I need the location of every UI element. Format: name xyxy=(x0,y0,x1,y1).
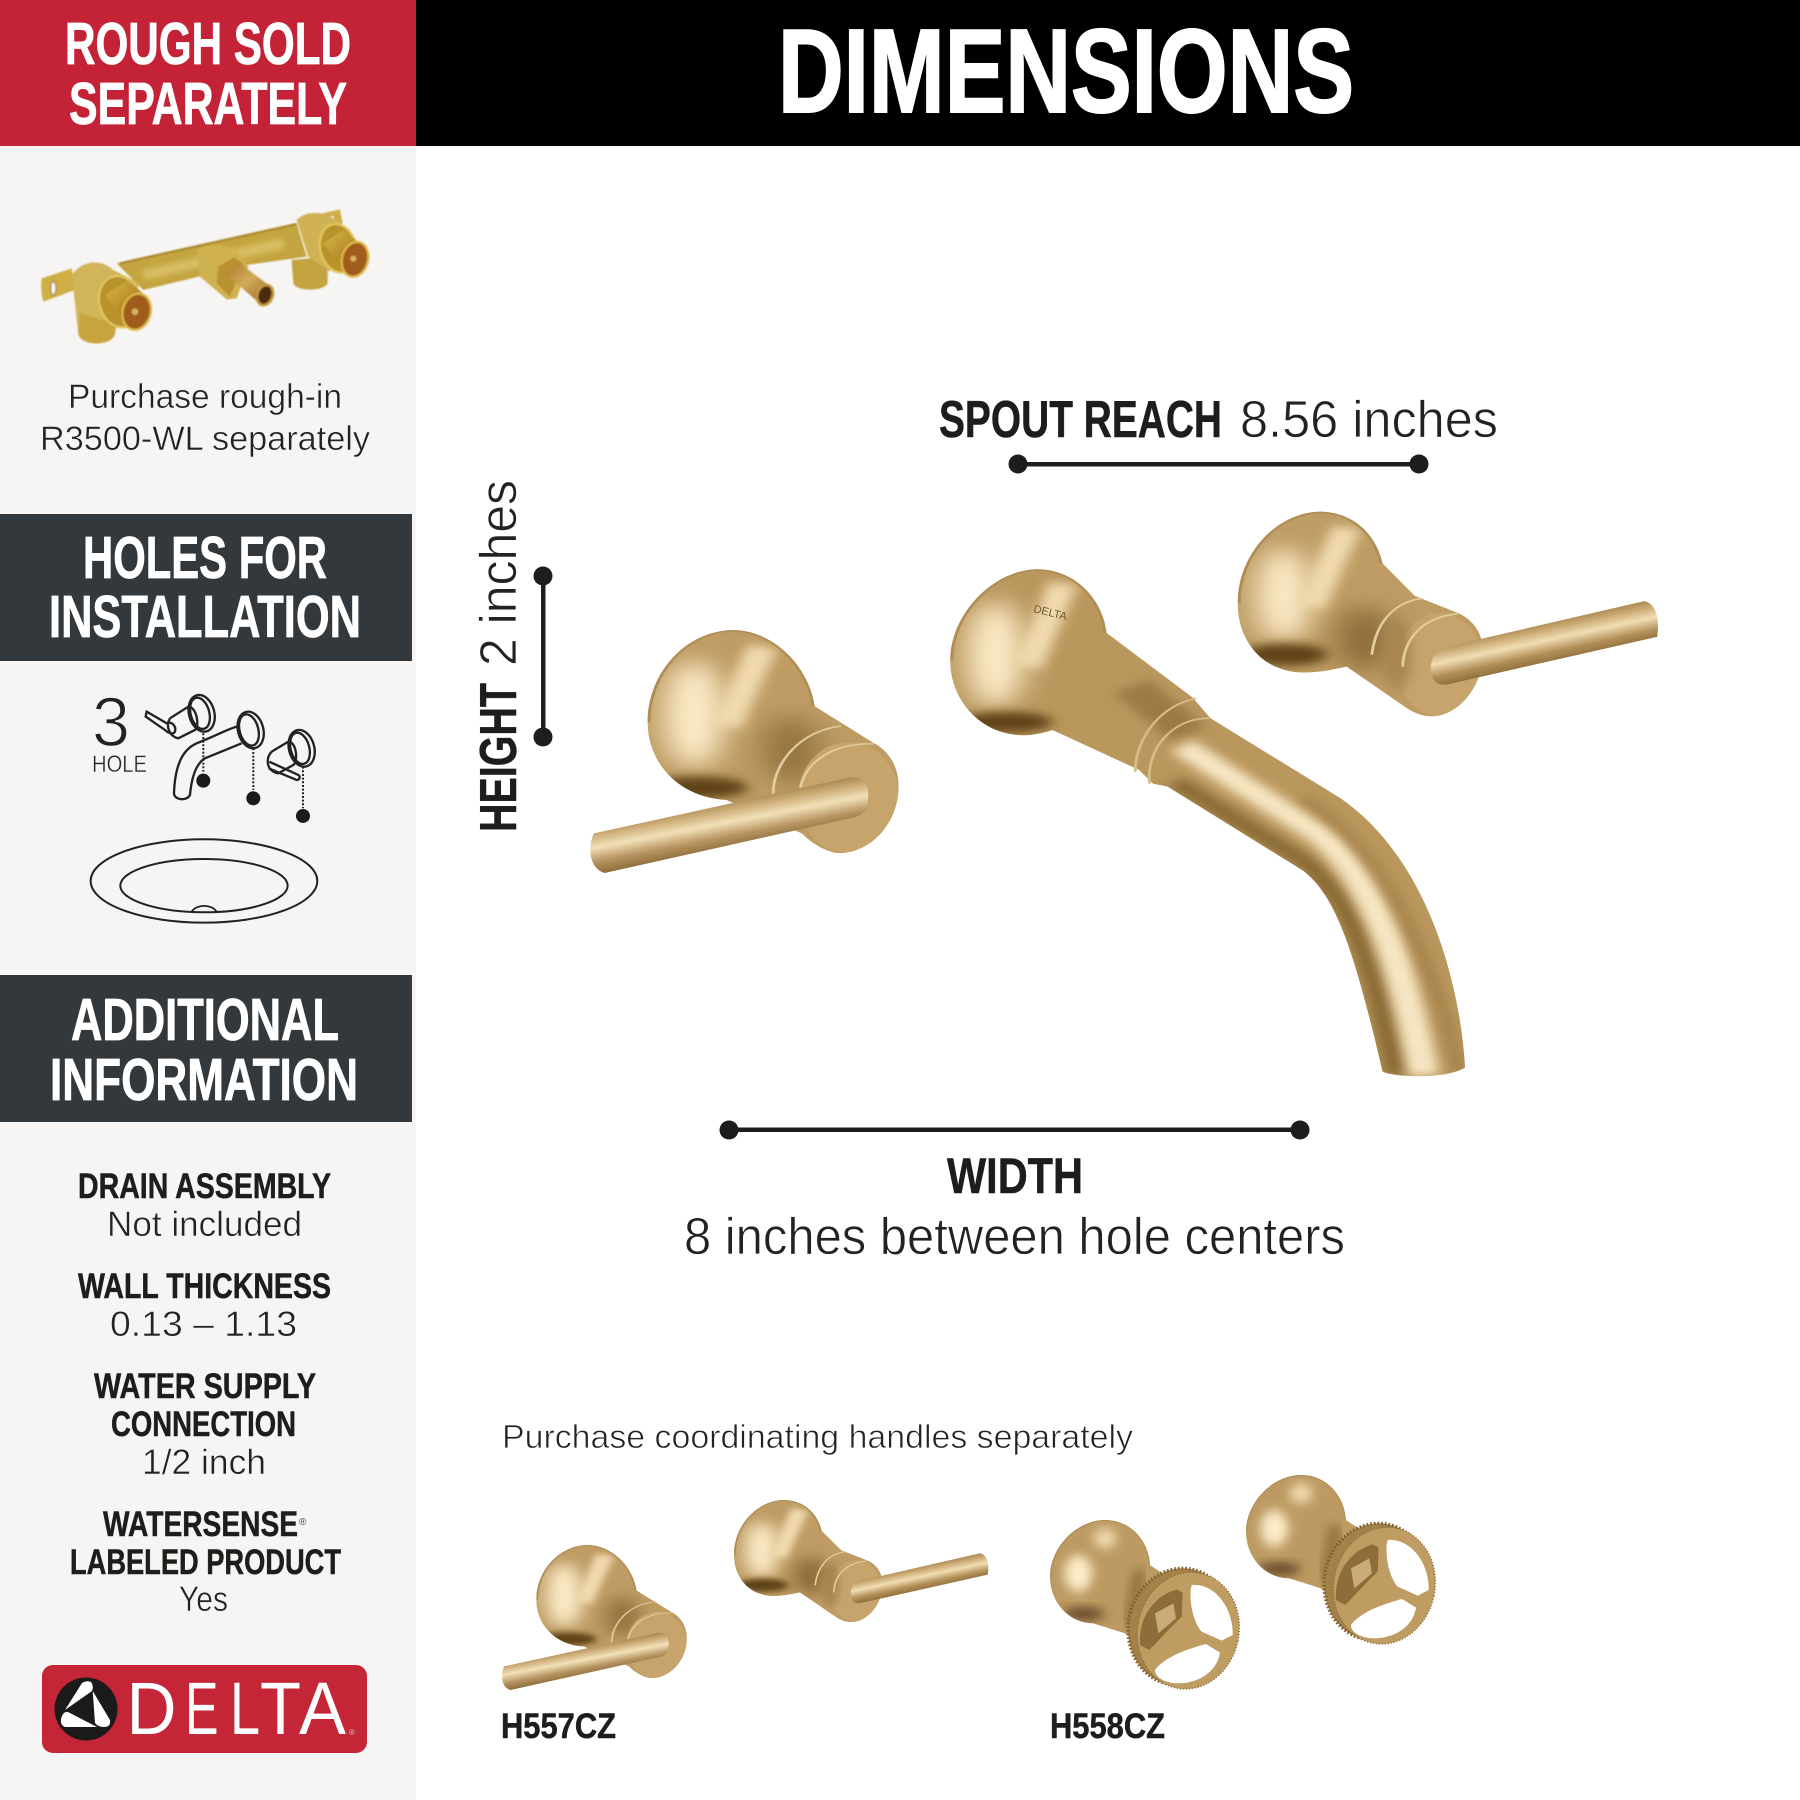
text block: additional information list: Yes xyxy=(179,1580,228,1619)
label: H558CZ: H558CZ xyxy=(1050,1707,1165,1746)
logo text on spout: DELTA xyxy=(1032,603,1069,623)
handle: left lever small xyxy=(502,1541,698,1690)
text block: additional information list: Not included xyxy=(107,1205,302,1244)
text block: additional information list: DRAIN ASSEMBLY xyxy=(78,1167,331,1206)
product image: wall mount faucet xyxy=(590,504,1658,1083)
heading: additional information: ADDITIONAL xyxy=(71,987,339,1053)
logo: delta: E xyxy=(185,1667,218,1750)
logo: delta xyxy=(42,1665,367,1753)
header: dimensions xyxy=(416,0,1800,146)
label: height: HEIGHT xyxy=(470,683,528,832)
label: spout reach: 8.56 inches xyxy=(1240,391,1498,449)
spout xyxy=(938,563,1483,1083)
product image: H557CZ handles xyxy=(502,1495,988,1690)
header: rough sold separately: ROUGH SOLD xyxy=(65,11,351,77)
text block: additional information list: WATERSENSE xyxy=(103,1505,298,1544)
heading: additional information: INFORMATION xyxy=(50,1047,358,1113)
label: spout reach xyxy=(939,391,1498,449)
text block: additional information list xyxy=(70,1167,341,1619)
heading: holes for installation: HOLES FOR xyxy=(83,525,327,591)
header: rough sold separately: SEPARATELY xyxy=(69,71,347,137)
product image: rough-in valve xyxy=(41,209,372,343)
label: width: WIDTH xyxy=(947,1148,1083,1204)
handle: right wheel xyxy=(1243,1472,1446,1654)
text: purchase coordinating handles: Purchase coordinating handles separately xyxy=(502,1418,1134,1455)
icon: 3 hole faucet and basin: HOLE xyxy=(92,751,147,778)
label: height: 2 inches xyxy=(470,480,528,666)
text: purchase rough-in: Purchase rough-in xyxy=(68,378,342,416)
arrow: height dimension line xyxy=(534,566,552,746)
text block: additional information list: WATER SUPPLY xyxy=(94,1367,316,1406)
text block: additional information list: 1/2 inch xyxy=(142,1443,266,1482)
left lever handle xyxy=(590,623,916,873)
logo: delta: L xyxy=(230,1667,260,1750)
logo: delta: T xyxy=(260,1667,301,1750)
arrow: width dimension line xyxy=(720,1120,1310,1140)
header: dimensions: DIMENSIONS xyxy=(778,5,1354,138)
text block: additional information list: CONNECTION xyxy=(111,1405,296,1444)
panel: sidebar xyxy=(0,146,416,1800)
logo: delta: A xyxy=(299,1667,347,1750)
label: height xyxy=(470,480,528,832)
heading: holes for installation xyxy=(0,514,412,661)
text: purchase rough-in xyxy=(40,378,370,458)
text: purchase rough-in: R3500-WL separately xyxy=(40,420,370,458)
product image: H558CZ handles xyxy=(1047,1472,1446,1699)
text block: additional information list: LABELED PRODUCT xyxy=(70,1543,341,1582)
text block: additional information list: WALL THICKNESS xyxy=(78,1267,331,1306)
label: width xyxy=(684,1148,1345,1266)
label: H557CZ: H557CZ xyxy=(501,1707,616,1746)
logo: delta: ® xyxy=(349,1728,355,1737)
logo: delta: D xyxy=(126,1667,176,1750)
icon: 3 hole faucet and basin xyxy=(91,683,319,923)
heading: holes for installation: INSTALLATION xyxy=(49,584,361,650)
text block: additional information list: 0.13 – 1.13 xyxy=(110,1305,297,1344)
handle: left wheel xyxy=(1047,1517,1250,1699)
text block: additional information list: ® xyxy=(299,1517,307,1528)
header: rough sold separately xyxy=(0,0,416,146)
arrow: spout reach dimension line xyxy=(1008,454,1428,474)
label: spout reach: SPOUT REACH xyxy=(939,391,1222,449)
label: width: 8 inches between hole centers xyxy=(684,1208,1345,1266)
handle: right lever small xyxy=(726,1495,988,1628)
right lever handle xyxy=(1225,504,1658,726)
icon: 3 hole faucet and basin: 3 xyxy=(92,683,130,761)
heading: additional information xyxy=(0,975,412,1122)
